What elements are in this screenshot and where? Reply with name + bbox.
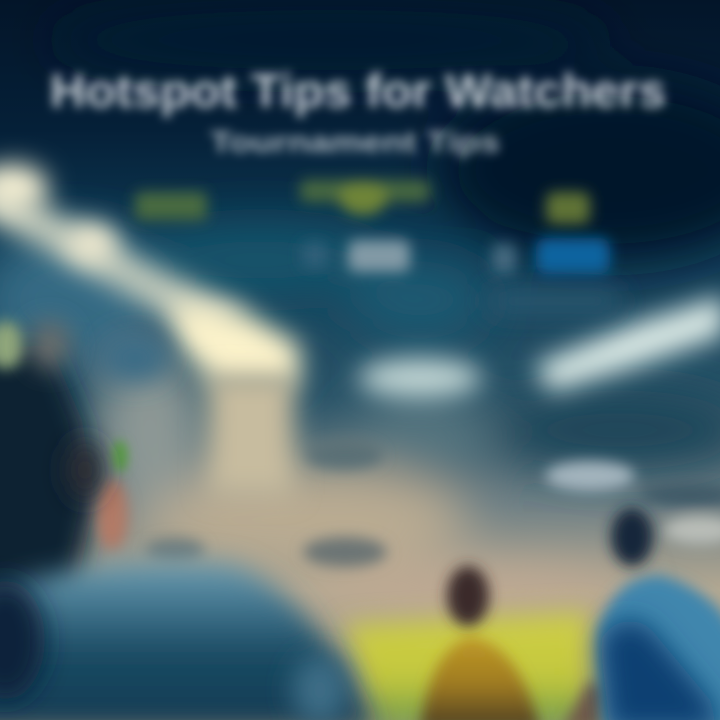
green label center <box>300 180 430 215</box>
bright cloud band <box>0 164 300 495</box>
hazy stand smudges <box>145 441 720 567</box>
spectator: blue shirt figure <box>562 508 720 720</box>
center grey label <box>302 240 410 272</box>
spectator: large foreground figure <box>0 321 375 720</box>
green label right <box>546 192 590 224</box>
title: Hotspot Tips for Watchers <box>50 64 666 117</box>
blue label and caption <box>490 238 620 312</box>
pitch <box>345 612 590 720</box>
dark cloud patch <box>101 334 169 382</box>
spectator: yellow shirt figure <box>420 566 540 720</box>
bright right cloud streaks <box>358 295 720 398</box>
green label left <box>135 192 207 220</box>
subtitle: Tournament Tips <box>210 126 500 159</box>
